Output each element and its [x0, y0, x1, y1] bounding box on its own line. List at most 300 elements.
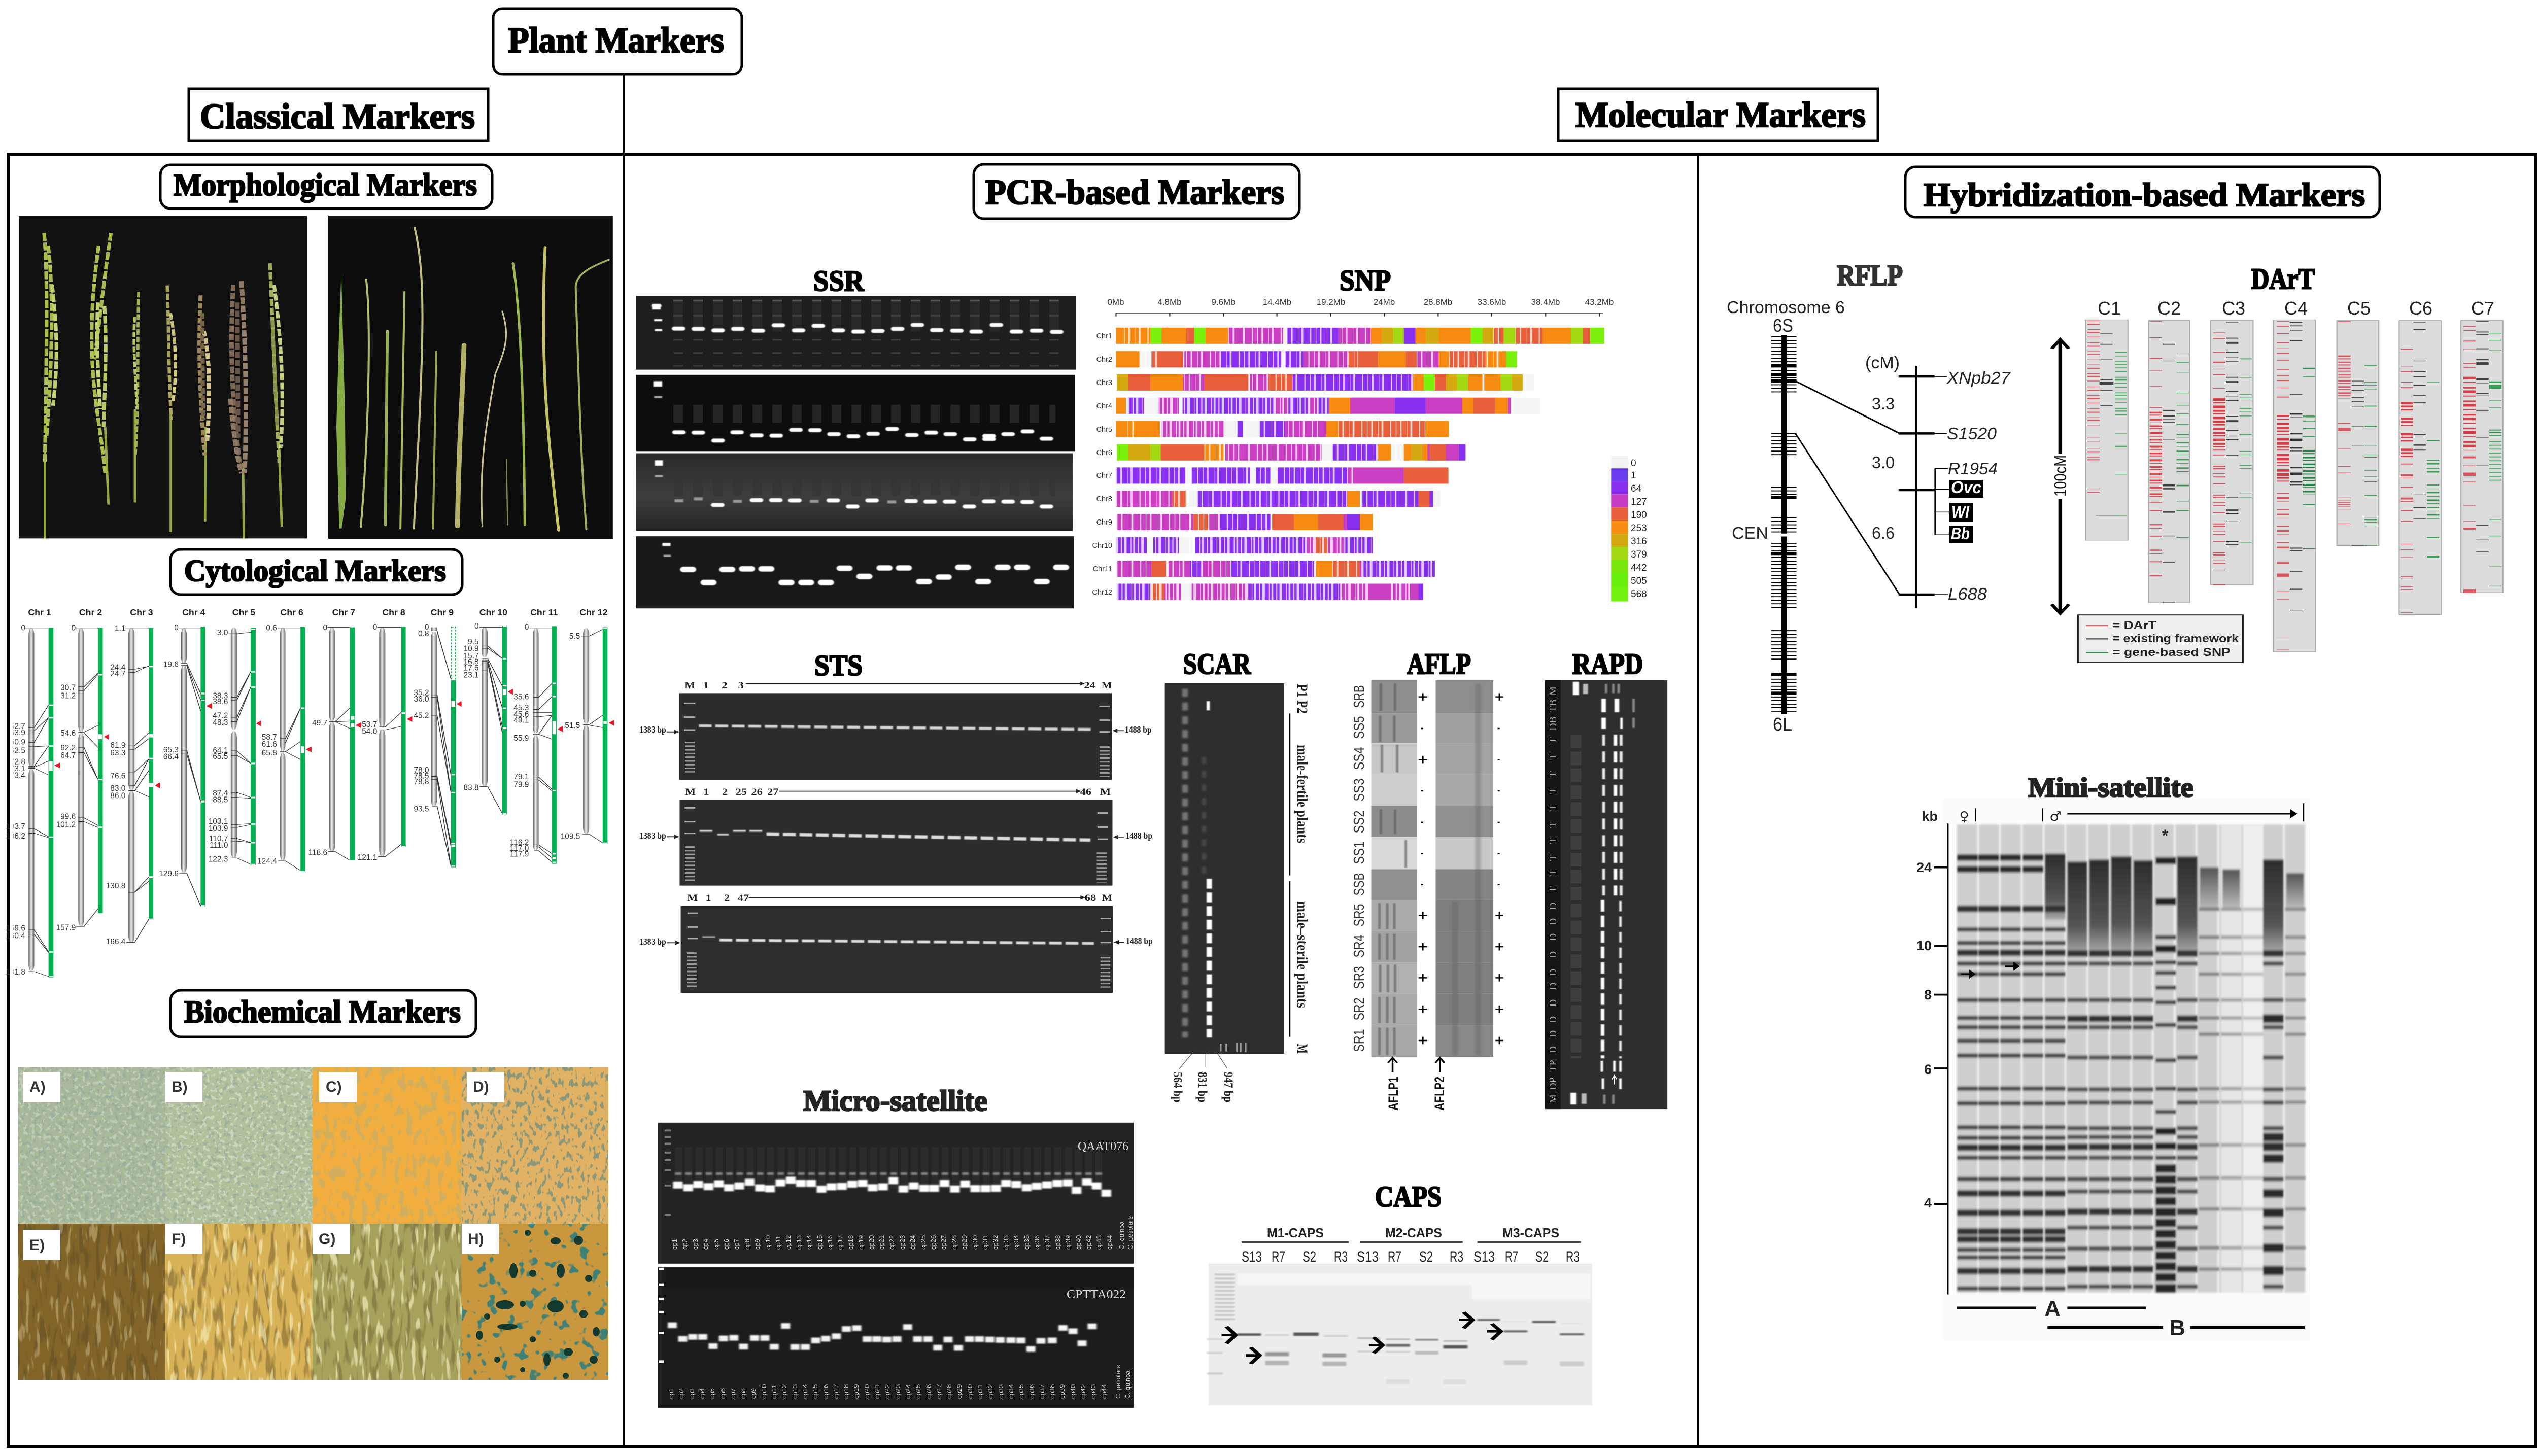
cell panel C: C) — [326, 1079, 342, 1095]
CAPS labels — [1267, 1225, 1559, 1240]
chromosome titles and position labels: 103.9 — [209, 824, 228, 833]
SNP axis — [1116, 313, 1603, 317]
STS gels: M — [684, 680, 696, 691]
Mini-satellite block: ♂ — [2049, 809, 2062, 824]
group labels C1 to C7: C6 — [2409, 298, 2432, 319]
chromosome titles and position labels: 62.5 — [10, 747, 25, 755]
chromosome titles and position labels: 93.5 — [414, 805, 429, 813]
SNP block — [1092, 264, 1647, 602]
chromosome titles and position labels: 129.6 — [159, 870, 179, 878]
lane labels gel 1: cp22 — [888, 1235, 896, 1250]
lane labels gel 1: cp17 — [836, 1235, 844, 1250]
CAPS block — [1209, 1180, 1592, 1405]
chromosome titles and position labels: 83.0 — [110, 784, 125, 793]
group labels C1 to C7 — [2098, 298, 2494, 319]
panel: hybridization-based markers — [1727, 167, 2503, 1341]
cell panel D — [462, 1067, 608, 1224]
chromosome titles and position labels: 30.7 — [60, 684, 76, 692]
heading: Classical Markers: Classical Markers — [200, 97, 475, 136]
group labels C1 to C7: C7 — [2471, 298, 2494, 319]
mini-satellite autoradiograph — [1934, 798, 2311, 1341]
chromosome titles and position labels: 118.6 — [308, 848, 327, 857]
chromosome titles and position labels: 36.0 — [414, 695, 429, 704]
lane labels gel 2: cp2 — [677, 1388, 685, 1399]
heading: Molecular Markers: Molecular Markers — [1575, 95, 1866, 135]
RAPD lane labels: T — [1548, 870, 1559, 876]
AFLP lane labels: SR1 — [1351, 1029, 1367, 1052]
RFLP labels: L688 — [1948, 584, 1987, 603]
photo: rice panicles — [19, 216, 307, 538]
chromosome titles and position labels: 106.2 — [6, 832, 25, 841]
lane labels gel 2: cp4 — [698, 1388, 706, 1399]
Mini-satellite block — [1916, 772, 2311, 1341]
heading: RFLP: RFLP — [1837, 259, 1903, 292]
CAPS block: S2 — [1535, 1249, 1549, 1265]
chromosome titles and position labels: 78.8 — [414, 778, 429, 786]
lane labels gel 2: cp34 — [1007, 1384, 1015, 1399]
chromosome titles and position labels: 15.7 — [464, 652, 479, 661]
AFLP arrow labels: AFLP1 — [1386, 1077, 1401, 1111]
axis labels and symbols: 24 — [1916, 860, 1932, 875]
RAPD lane labels: M — [1548, 1094, 1559, 1103]
RFLP labels: Chromosome 6 — [1727, 298, 1845, 317]
100 cM scale arrow — [2051, 339, 2069, 613]
STS gels: 3 — [738, 680, 744, 691]
RFLP labels: CEN — [1732, 524, 1768, 542]
lane labels gel 1: cp20 — [868, 1235, 875, 1250]
chromosome titles and position labels: 9.5 — [468, 638, 479, 646]
heading: RAPD: RAPD — [1572, 647, 1643, 680]
lane labels gel 2: cp27 — [935, 1384, 943, 1399]
CAPS block: R7 — [1272, 1249, 1285, 1265]
STS gels: 1488 bp — [1125, 830, 1152, 841]
Mini-satellite block: * — [2162, 826, 2169, 845]
STS gels: 2 — [722, 786, 728, 798]
lane labels gel 1: cp33 — [1002, 1235, 1010, 1250]
chromosome titles and position labels: 160.4 — [6, 932, 25, 941]
lane labels gel 1: cp14 — [805, 1235, 813, 1250]
RFLP labels: 3.3 — [1872, 394, 1895, 413]
chromosome titles and position labels: 38.3 — [213, 692, 228, 701]
chromosome titles and position labels: 78.0 — [414, 766, 429, 775]
heading: SCAR: SCAR — [1183, 647, 1251, 680]
cell panel B — [165, 1067, 313, 1224]
chromosome titles and position labels: 19.6 — [163, 661, 179, 669]
lane labels gel 1: cp25 — [919, 1235, 927, 1250]
lane labels gel 2: cp31 — [976, 1384, 984, 1399]
STS gels: 26 — [751, 786, 763, 798]
lane labels gel 1: C. petiolare — [1126, 1216, 1134, 1250]
SNP axis labels: 0Mb — [1107, 297, 1124, 307]
chromosome titles and position labels: 0 — [373, 623, 377, 632]
group C6 — [2399, 321, 2441, 615]
chromosome 1 — [25, 628, 60, 978]
RAPD lane labels: T — [1548, 754, 1559, 760]
lane labels gel 1: cp10 — [764, 1235, 772, 1250]
lane labels gel 1: cp43 — [1095, 1235, 1103, 1250]
photo: rice leaves — [328, 216, 613, 539]
chromosome titles and position labels: 122.3 — [209, 855, 228, 864]
lane labels gel 1: cp12 — [784, 1235, 792, 1250]
STS gels: M — [1102, 892, 1113, 904]
lane labels gel 2: cp19 — [852, 1384, 860, 1399]
heading: Biochemical Markers — [170, 990, 476, 1037]
cell culture image grid — [18, 1067, 608, 1380]
RAPD lane labels: D — [1548, 903, 1559, 910]
SNP density heatmap — [1116, 313, 1604, 592]
RFLP chromosome and linkage map — [1771, 335, 1949, 714]
chromosome titles and position labels: 103.1 — [209, 817, 228, 826]
CAPS block: R3 — [1450, 1249, 1463, 1265]
chromosome titles and position labels: 1.1 — [115, 625, 125, 633]
lane labels gel 1: cp32 — [991, 1235, 999, 1250]
SNP axis labels: 33.6Mb — [1478, 297, 1506, 307]
lane labels gel 1: cp42 — [1085, 1235, 1092, 1250]
chromosome titles and position labels: 124.4 — [257, 857, 277, 866]
lane labels gel 1: cp31 — [981, 1235, 989, 1250]
chromosome titles and position labels: 61.6 — [262, 740, 277, 749]
lane labels gel 1: cp18 — [847, 1235, 854, 1250]
group labels C1 to C7: C1 — [2098, 298, 2121, 319]
SNP axis labels: 43.2Mb — [1585, 297, 1614, 307]
lane labels gel 2: cp20 — [863, 1384, 871, 1399]
lane labels gel 2 — [667, 1365, 1132, 1399]
heading: CAPS: CAPS — [1375, 1180, 1442, 1213]
STS gels: 1383 bp — [639, 937, 666, 947]
lane labels gel 1: C. quinoa — [1118, 1221, 1125, 1250]
lane labels gel 1: cp36 — [1033, 1235, 1041, 1250]
chromosome titles and position labels: 45.3 — [513, 704, 529, 712]
SSR block — [636, 264, 1076, 608]
legend labels: = gene-based SNP — [2112, 646, 2231, 658]
AFLP lane labels: SS1 — [1351, 841, 1367, 864]
lane labels gel 2: cp39 — [1058, 1384, 1066, 1399]
RAPD gel — [1545, 680, 1667, 1109]
lane labels gel 2: cp42 — [1079, 1384, 1087, 1399]
SNP legend: 253 — [1631, 523, 1647, 534]
lane labels gel 1: cp4 — [702, 1239, 709, 1250]
axis labels and symbols: 10 — [1916, 938, 1932, 953]
axis labels and symbols: 4 — [1924, 1195, 1932, 1210]
STS gels: 1 — [703, 786, 709, 798]
chromosome titles and position labels: 83.8 — [464, 783, 479, 792]
chromosome titles and position labels: Chr 5 — [232, 607, 255, 617]
heading: Morphological Markers: Morphological Markers — [174, 168, 477, 202]
chromosome titles and position labels: 166.4 — [106, 938, 126, 946]
chromosome titles and position labels: 0 — [72, 623, 76, 632]
chromosome titles and position labels: 45.2 — [414, 712, 429, 720]
SSR gels — [636, 296, 1076, 608]
chromosome titles and position labels: 61.9 — [110, 741, 125, 750]
marker label QAAT076: QAAT076 — [1078, 1140, 1128, 1153]
SNP chromosome labels: Chr7 — [1096, 472, 1112, 480]
AFLP block — [1351, 647, 1503, 1111]
lane labels gel 1: cp35 — [1023, 1235, 1031, 1250]
lane labels gel 1: cp8 — [743, 1239, 751, 1250]
lane labels gel 1: cp24 — [909, 1235, 916, 1250]
RFLP labels: Bb — [1951, 524, 1970, 543]
SNP chromosome labels: Chr2 — [1096, 356, 1112, 364]
group C7 — [2461, 320, 2503, 593]
RAPD lane labels: T — [1548, 855, 1559, 861]
chromosome titles and position labels: 0 — [425, 623, 429, 632]
chromosome titles and position labels: 24.7 — [110, 670, 125, 678]
SCAR labels: 947 bp — [1221, 1072, 1235, 1102]
chromosome titles and position labels: 64.1 — [213, 746, 228, 755]
chromosome titles and position labels: 101.2 — [56, 820, 76, 829]
chromosome titles and position labels: 0 — [474, 622, 479, 631]
heading: Hybridization-based Markers — [1905, 167, 2380, 217]
RAPD lane labels: TB — [1548, 699, 1559, 712]
STS gels: M — [687, 892, 698, 904]
SCAR gel — [1165, 683, 1290, 1069]
AFLP lane labels: SR3 — [1351, 966, 1367, 989]
SCAR labels: M — [1294, 1044, 1311, 1054]
heading: Biochemical Markers: Biochemical Markers — [184, 995, 461, 1029]
CAPS block: S13 — [1473, 1249, 1495, 1265]
chromosome titles and position labels: 52.7 — [10, 722, 25, 731]
chromosome 9 — [431, 627, 462, 868]
RFLP labels: 6S — [1773, 315, 1793, 336]
chromosome titles and position labels: 86.0 — [110, 792, 125, 801]
lane labels gel 2: cp29 — [955, 1384, 963, 1399]
lane labels gel 2: cp12 — [780, 1384, 788, 1399]
chromosome 2 — [76, 628, 109, 926]
lane labels gel 2: cp14 — [801, 1384, 809, 1399]
lane labels gel 2: cp30 — [966, 1384, 974, 1399]
SCAR labels: male-fertile plants — [1294, 745, 1311, 843]
SNP legend: 505 — [1631, 576, 1647, 586]
SNP chromosome labels: Chr10 — [1092, 542, 1112, 550]
100cM label: 100cM — [2051, 455, 2070, 497]
cell panel B: B) — [172, 1079, 188, 1095]
lane labels gel 2: cp18 — [842, 1384, 850, 1399]
SCAR labels: male–sterile plants — [1294, 901, 1311, 1008]
chromosome titles and position labels: 111.0 — [210, 841, 228, 850]
cell panel G — [313, 1224, 462, 1380]
RFLP labels: R1954 — [1948, 459, 1998, 478]
lane labels gel 2: cp17 — [832, 1384, 840, 1399]
chromosome titles and position labels: 0 — [323, 623, 327, 632]
RFLP labels: 3.0 — [1872, 453, 1895, 472]
lane labels gel 2: cp24 — [904, 1384, 912, 1399]
lane labels gel 1: cp16 — [826, 1235, 834, 1250]
lane labels gel 1: cp29 — [961, 1235, 968, 1250]
STS gels: 1488 bp — [1126, 936, 1153, 946]
axis labels and symbols: 6 — [1924, 1062, 1932, 1077]
cell panel D: D) — [473, 1079, 489, 1095]
micro-satellite gels — [658, 1123, 1134, 1408]
chromosome 7 — [327, 628, 361, 860]
STS gels — [639, 680, 1153, 993]
lane labels gel 1: cp37 — [1043, 1235, 1051, 1250]
STS gels: 2 — [724, 892, 730, 904]
chromosome 8 — [377, 627, 412, 856]
lane labels gel 1: cp2 — [681, 1239, 689, 1250]
lane labels gel 1: cp19 — [857, 1235, 865, 1250]
STS gels: 27 — [767, 786, 778, 798]
lane labels gel 2: cp11 — [770, 1385, 778, 1399]
lane labels gel 2: cp26 — [925, 1384, 933, 1399]
SNP chromosome labels: Chr9 — [1096, 518, 1112, 527]
lane labels gel 2: cp3 — [688, 1388, 696, 1399]
STS gels: 2 — [722, 680, 727, 691]
RFLP labels: Ovc — [1951, 478, 1981, 497]
chromosome titles and position labels: 121.1 — [358, 853, 377, 862]
chromosome titles and position labels: 58.7 — [262, 733, 277, 742]
chromosome titles and position labels: Chr 4 — [182, 607, 205, 617]
lane labels gel 1: cp34 — [1012, 1235, 1020, 1250]
chromosome titles and position labels: 48.3 — [213, 718, 228, 727]
lane labels gel 2: cp5 — [708, 1388, 716, 1399]
panel: morphological markers — [19, 165, 613, 539]
SNP chromosome labels: Chr5 — [1096, 426, 1112, 434]
CAPS block: S2 — [1302, 1249, 1316, 1265]
chromosome map — [6, 607, 614, 978]
SNP axis labels: 28.8Mb — [1424, 297, 1452, 307]
RAPD lane labels: T — [1548, 771, 1559, 777]
panel: cytological markers — [6, 549, 614, 978]
RAPD lane labels: D — [1548, 933, 1559, 941]
chromosome titles and position labels: 45.6 — [513, 710, 529, 719]
STS block — [639, 649, 1153, 993]
chromosome titles and position labels: 38.6 — [213, 698, 228, 706]
chromosome titles and position labels: 23.1 — [464, 671, 479, 679]
chromosome titles and position labels: 62.2 — [60, 744, 76, 752]
group labels A and B: B — [2169, 1315, 2185, 1340]
RAPD lane labels: T — [1548, 737, 1559, 743]
RFLP block — [1727, 259, 2011, 735]
STS gels: 24 — [1084, 680, 1095, 691]
STS gels: M — [1100, 786, 1111, 798]
cell panel F — [165, 1224, 313, 1380]
chromosome titles and position labels: 159.6 — [6, 924, 25, 933]
AFLP arrow labels — [1386, 1077, 1447, 1111]
chromosome titles and position labels: Chr 11 — [530, 607, 558, 617]
RAPD lane labels — [1548, 686, 1559, 1103]
chromosome titles and position labels: 35.6 — [513, 692, 529, 701]
group C3 — [2211, 320, 2253, 585]
chromosome 12 — [581, 628, 614, 844]
lane labels gel 1: cp7 — [733, 1239, 740, 1250]
chromosome titles and position labels: 31.2 — [60, 692, 76, 701]
RFLP labels: 6.6 — [1872, 524, 1895, 542]
chromosome titles and position labels: 157.9 — [56, 924, 76, 932]
STS gels: M — [1102, 680, 1112, 691]
lane labels gel 2: C. petiolare — [1114, 1365, 1122, 1399]
CAPS labels: M1-CAPS — [1267, 1225, 1324, 1240]
chromosome titles and position labels: 24.4 — [110, 663, 126, 672]
CAPS block: S2 — [1419, 1249, 1433, 1265]
SNP axis labels: 24Mb — [1374, 297, 1395, 307]
AFLP lane labels: SS2 — [1351, 811, 1367, 833]
lane labels gel 2: cp8 — [739, 1388, 747, 1399]
group C2 — [2149, 320, 2190, 603]
SNP chromosome labels: Chr8 — [1096, 495, 1112, 503]
chromosome titles and position labels: 88.5 — [213, 796, 228, 805]
lane labels gel 1 — [671, 1216, 1134, 1250]
group labels A and B: A — [2044, 1296, 2061, 1321]
SCAR labels: 831 bp — [1195, 1072, 1209, 1102]
lane labels gel 2: cp25 — [914, 1384, 922, 1399]
lane labels gel 1: cp23 — [899, 1235, 906, 1250]
chromosome titles and position labels: 16.8 — [464, 658, 479, 667]
chromosome 6 — [278, 627, 312, 871]
heading: Micro-satellite: Micro-satellite — [803, 1084, 987, 1117]
RFLP labels: (cM) — [1865, 353, 1900, 372]
lane labels gel 1: cp3 — [692, 1239, 699, 1250]
cell panel A: A) — [29, 1079, 46, 1095]
AFLP lane labels — [1351, 685, 1367, 1052]
STS gels: M — [685, 786, 696, 798]
SNP legend: 64 — [1631, 483, 1642, 494]
legend labels: = DArT — [2112, 619, 2157, 632]
heading: DArT: DArT — [2251, 262, 2315, 295]
RAPD lane labels: D — [1548, 983, 1559, 990]
chromosome titles and position labels: 10.9 — [464, 645, 479, 653]
chromosome titles and position labels: 0 — [21, 623, 25, 632]
RFLP labels: S1520 — [1947, 424, 1997, 443]
lane labels gel 2: C. quinoa — [1124, 1370, 1132, 1399]
heading: SSR: SSR — [813, 264, 865, 297]
SNP legend: 1 — [1631, 470, 1636, 481]
AFLP lane labels: SS4 — [1351, 747, 1367, 770]
AFLP lane labels: SR4 — [1351, 934, 1367, 958]
lane labels gel 2: cp9 — [749, 1388, 757, 1399]
heading: STS: STS — [814, 649, 863, 682]
AFLP lane labels: SR5 — [1351, 904, 1367, 926]
CAPS block: S13 — [1357, 1249, 1379, 1265]
SNP chromosome labels: Chr12 — [1092, 588, 1112, 597]
marker label CPTTA022: CPTTA022 — [1067, 1288, 1126, 1301]
legend labels: = existing framework — [2112, 632, 2239, 645]
heading: AFLP: AFLP — [1407, 647, 1471, 680]
heading: Cytological Markers — [170, 549, 462, 595]
lane labels gel 2: cp23 — [894, 1384, 902, 1399]
chromosome titles and position labels: 99.6 — [60, 812, 76, 821]
chromosome titles and position labels: 51.5 — [565, 721, 580, 730]
RAPD lane labels: TP — [1548, 1060, 1559, 1072]
panel: PCR-based markers — [636, 164, 1667, 1408]
group labels C1 to C7: C2 — [2157, 298, 2181, 319]
RFLP labels — [1727, 298, 2011, 735]
STS gels: 1383 bp — [639, 830, 666, 841]
chromosome titles and position labels: 103.7 — [6, 822, 25, 831]
lane labels gel 2: cp37 — [1038, 1384, 1046, 1399]
RFLP labels: XNpb27 — [1946, 368, 2011, 387]
CAPS labels: M3-CAPS — [1502, 1225, 1559, 1240]
axis labels and symbols: 8 — [1924, 987, 1932, 1002]
SNP legend: 127 — [1631, 497, 1647, 507]
heading: Cytological Markers: Cytological Markers — [184, 554, 446, 587]
AFLP lane labels: SSB — [1351, 873, 1367, 896]
cell panel H — [462, 1224, 608, 1380]
chromosome titles and position labels: 117.0 — [510, 844, 529, 853]
group labels C1 to C7: C3 — [2222, 298, 2245, 319]
chromosome titles and position labels: 0.6 — [266, 623, 277, 632]
SNP chromosome labels: Chr4 — [1096, 402, 1112, 410]
heading: PCR-based Markers: PCR-based Markers — [985, 173, 1284, 212]
lane labels gel 2: cp40 — [1069, 1384, 1077, 1399]
chromosome titles and position labels: 117.9 — [510, 850, 529, 858]
AFLP lane labels: SRB — [1351, 685, 1367, 708]
RAPD lane labels: T — [1548, 805, 1559, 811]
lane labels gel 2: cp36 — [1028, 1384, 1036, 1399]
cell panel E — [18, 1224, 165, 1380]
lane labels gel 2: cp44 — [1100, 1384, 1108, 1399]
chromosome titles and position labels: Chr 9 — [431, 607, 454, 617]
RAPD block — [1545, 647, 1667, 1109]
